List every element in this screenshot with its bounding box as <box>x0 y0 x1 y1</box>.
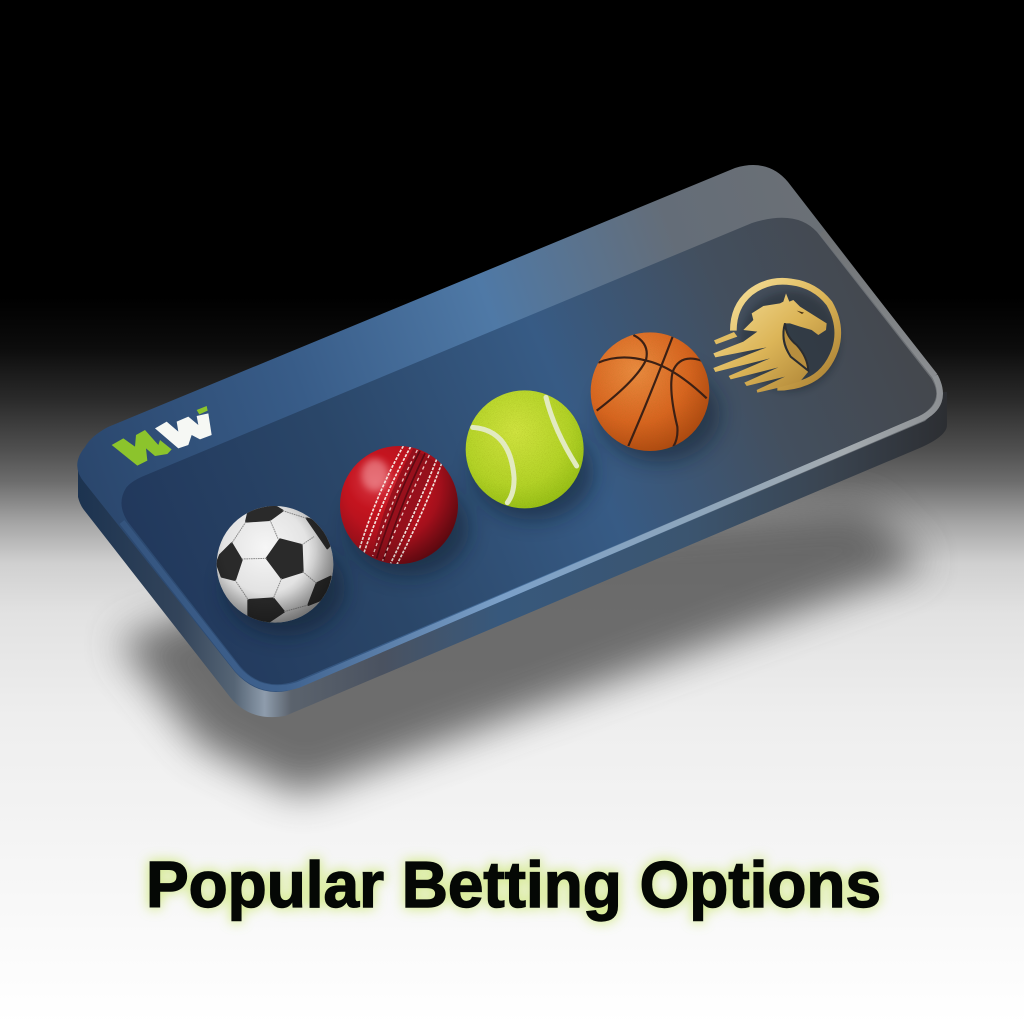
title: Popular Betting Options <box>146 848 881 921</box>
slab lip, right edge <box>822 232 935 376</box>
icon: tennis ball <box>466 390 584 508</box>
icon: basketball <box>591 332 709 451</box>
inner recessed panel <box>121 218 936 684</box>
panel: floating slab <box>77 165 947 717</box>
icon: cricket ball <box>340 446 458 565</box>
title glow: Popular Betting Options <box>146 848 881 921</box>
slab drop shadow <box>118 505 925 795</box>
slab lip highlight <box>122 376 940 688</box>
icon: golden horse emblem <box>713 281 840 393</box>
icon: soccer ball <box>217 505 333 623</box>
ball shadows <box>225 366 720 636</box>
slab side wall <box>78 392 947 717</box>
slab top face <box>77 165 942 692</box>
logo: WW <box>112 406 212 466</box>
